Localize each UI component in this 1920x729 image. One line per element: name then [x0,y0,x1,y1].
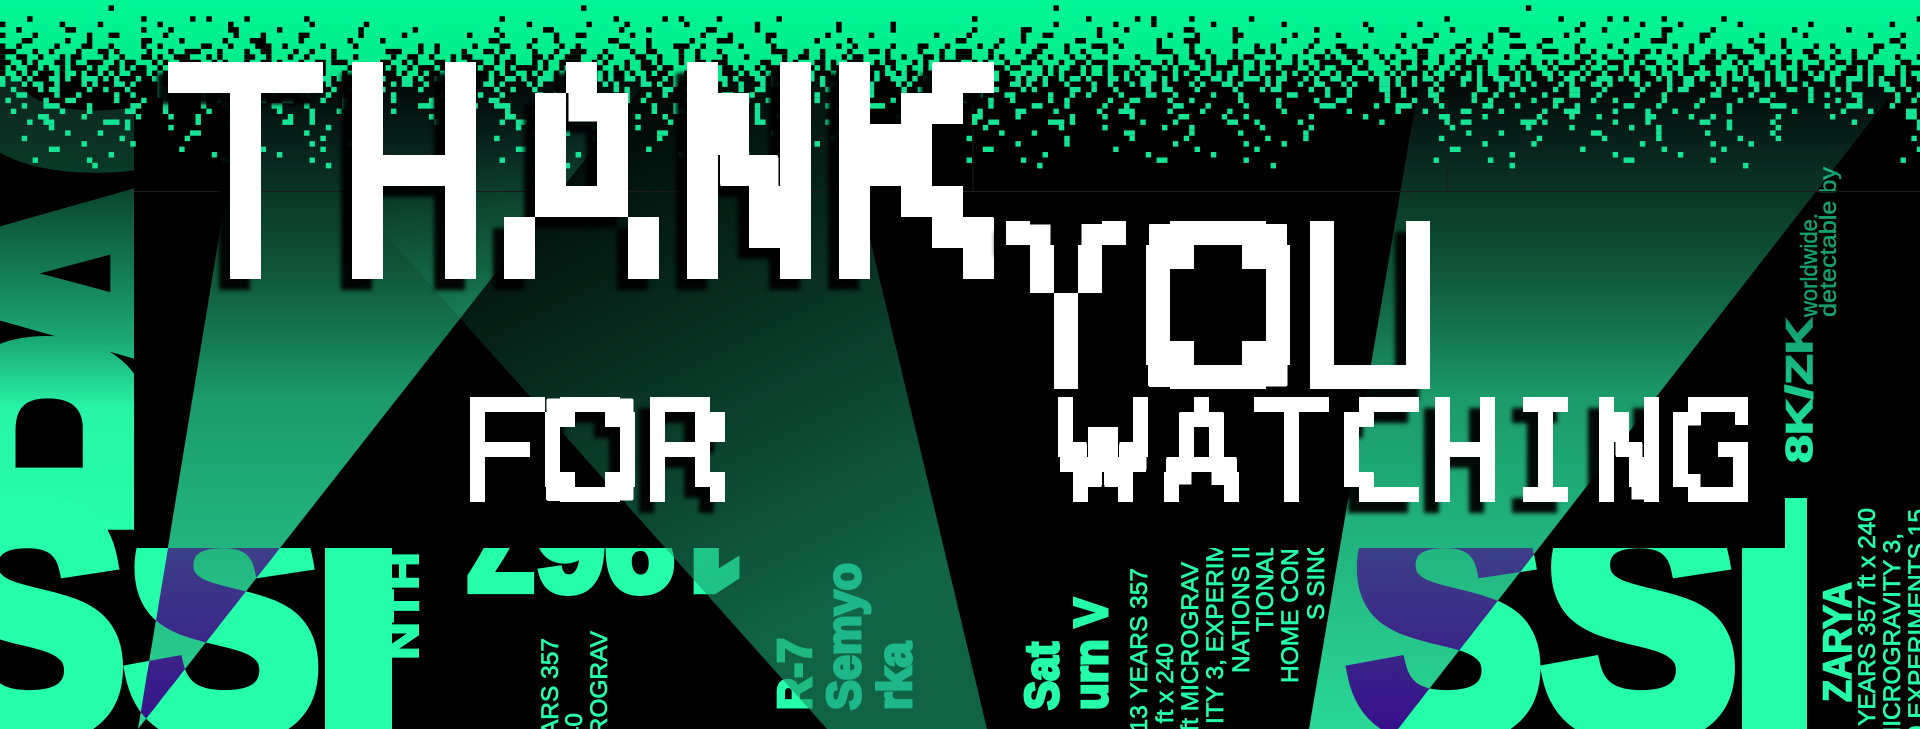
bar right [1742,540,1807,729]
pixel noise: dark pixels on band [0,8,1920,73]
name: R-7 Semyorka: R-7 [768,638,821,710]
headline: FOR [452,368,732,537]
bar left [325,540,392,729]
caption detectable by worldwide: worldwide. [1796,213,1822,318]
rocket names [768,563,1117,710]
column: Saturn V specs upper: ft x 240 [1152,643,1179,723]
column: R-7 specs [537,630,613,729]
text columns behind panel [537,477,1920,729]
rotated label NTH: NTH [379,552,428,660]
beam 2 centre [176,0,987,729]
headline: YOU [1007,175,1453,444]
name: R-7 Semyorka: rka [868,641,921,710]
column: Saturn V specs lower: NATIONS IN [1228,535,1255,673]
headline: FOR: F [452,368,548,536]
column: Saturn V specs lower [1202,477,1330,724]
headline: FOR: O [529,369,651,537]
headline: YOU: Y [1007,177,1125,444]
headline: THANK: T [165,3,326,349]
column: Saturn V specs upper [1126,561,1204,729]
name: R-7 Semyorka: Semyo [817,563,870,710]
headline: FOR: R [635,368,732,536]
headline: WATCHING: N [1590,369,1668,537]
headline: WATCHING: G [1661,368,1757,536]
headline: WATCHING [1057,368,1757,537]
upside-down year: 1967 [466,477,744,616]
name: Saturn V: urn V [1064,597,1117,710]
headline: WATCHING: I [1506,370,1585,537]
headline: THANK: K [811,2,1014,350]
beam 1 left [138,0,710,729]
column: Zarya specs: YEARS 357 ft x 240 [1854,508,1881,726]
name: Zarya: ZARYA [1816,582,1860,702]
column: Saturn V specs lower: TIONAL [1252,544,1279,632]
column: Zarya specs [1854,508,1920,729]
column: Saturn V specs upper: 13 YEARS 357 [1126,568,1153,729]
pixel noise: green pixels below band [0,79,1920,166]
beam 3 right [1309,0,1920,729]
top green band [0,0,1920,76]
headline: THANK: N [669,2,829,350]
caption detectable by worldwide: detectable by [1815,166,1841,317]
name: Saturn V [1015,597,1117,710]
headline: YOU: O [1121,175,1315,443]
column: Saturn V specs upper: ft MICROGRAV [1177,561,1204,729]
headline: YOU: U [1287,175,1453,443]
logo 8K/ZK: 8K/ZK [1779,318,1820,463]
column: Saturn V specs lower: HOME CONTROL [1277,483,1304,683]
black headline panel [134,0,1785,548]
headline: WATCHING: C [1332,368,1428,536]
headline: THANK: H [334,2,494,350]
headline: WATCHING: W [1057,368,1149,536]
headline: THANK [165,2,1014,350]
headline: THANK: A [498,2,665,349]
bar right top [1785,498,1807,558]
headline: WATCHING: T [1252,370,1331,537]
headline: WATCHING: A [1161,368,1242,536]
name: R-7 Semyorka [768,563,921,710]
caption detectable by worldwide [1796,166,1841,318]
headline: WATCHING: H [1426,369,1504,537]
faint grid lines [134,100,1920,192]
column: Saturn V specs lower: S SINCE [1303,522,1330,620]
name: Saturn V: Sat [1015,642,1068,710]
column: Saturn V specs lower: ITY 3, EXPERIMENTS [1202,477,1229,724]
